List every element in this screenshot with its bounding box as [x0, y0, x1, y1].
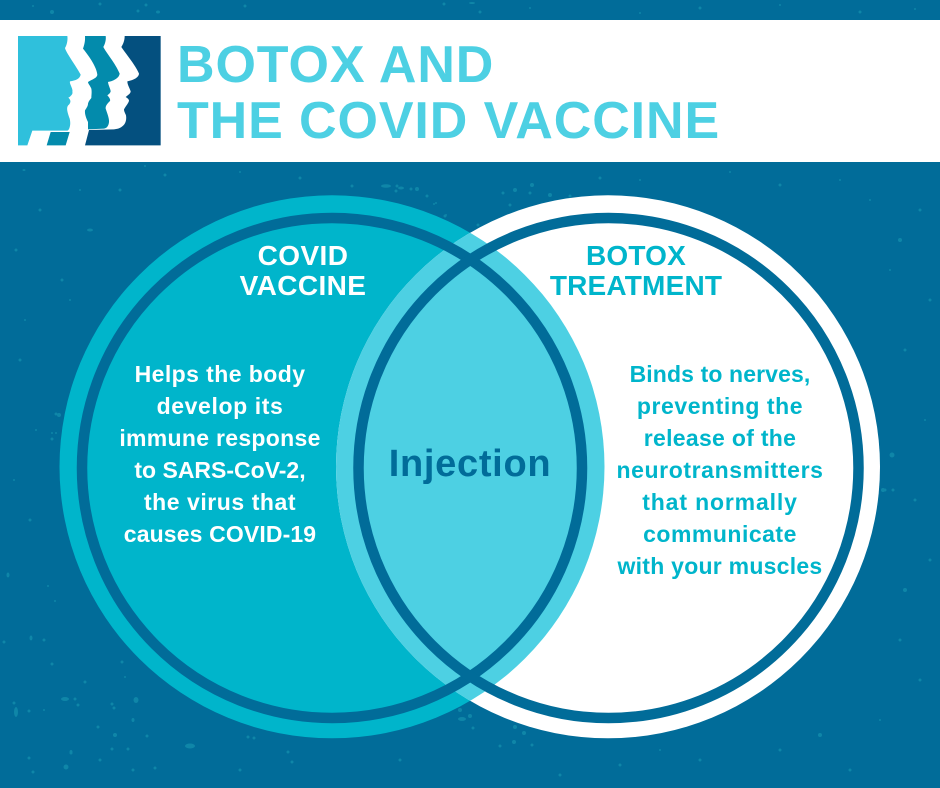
- label: covid vaccine: COVID: [258, 240, 348, 271]
- title: THE COVID VACCINE: [177, 92, 720, 150]
- text: injection: Injection: [389, 443, 551, 485]
- label: botox treatment: [550, 240, 722, 301]
- text: covid vaccine description: the virus that: [144, 489, 296, 515]
- overlap region: [336, 233, 604, 701]
- text: covid vaccine description: to SARS-CoV-2,: [134, 457, 306, 483]
- text: botox description: [616, 361, 824, 579]
- text: covid vaccine description: causes COVID-19: [124, 521, 316, 547]
- rings: [82, 218, 858, 718]
- label: covid vaccine: [240, 240, 366, 301]
- venn diagram: [60, 195, 880, 738]
- text: botox description: neurotransmitters: [616, 457, 824, 483]
- circle: botox treatment: [336, 195, 880, 738]
- label: botox treatment: TREATMENT: [550, 270, 722, 301]
- text: covid vaccine description: Helps the body: [135, 361, 305, 387]
- text: botox description: with your muscles: [618, 553, 822, 579]
- text: covid vaccine description: develop its: [157, 393, 283, 419]
- text: covid vaccine description: immune response: [119, 425, 321, 451]
- text: botox description: Binds to nerves,: [630, 361, 810, 387]
- text: botox description: communicate: [643, 521, 797, 547]
- label: covid vaccine: VACCINE: [240, 270, 366, 301]
- header band: [0, 20, 940, 162]
- text: botox description: that normally: [642, 489, 798, 515]
- circle: covid vaccine: [60, 195, 604, 738]
- logo: three face profiles: [18, 36, 161, 146]
- text: covid vaccine description: [119, 361, 321, 547]
- title: BOTOX AND: [177, 36, 494, 94]
- text: botox description: release of the: [644, 425, 796, 451]
- label: botox treatment: BOTOX: [586, 240, 686, 271]
- text: botox description: preventing the: [637, 393, 803, 419]
- title: [177, 36, 720, 150]
